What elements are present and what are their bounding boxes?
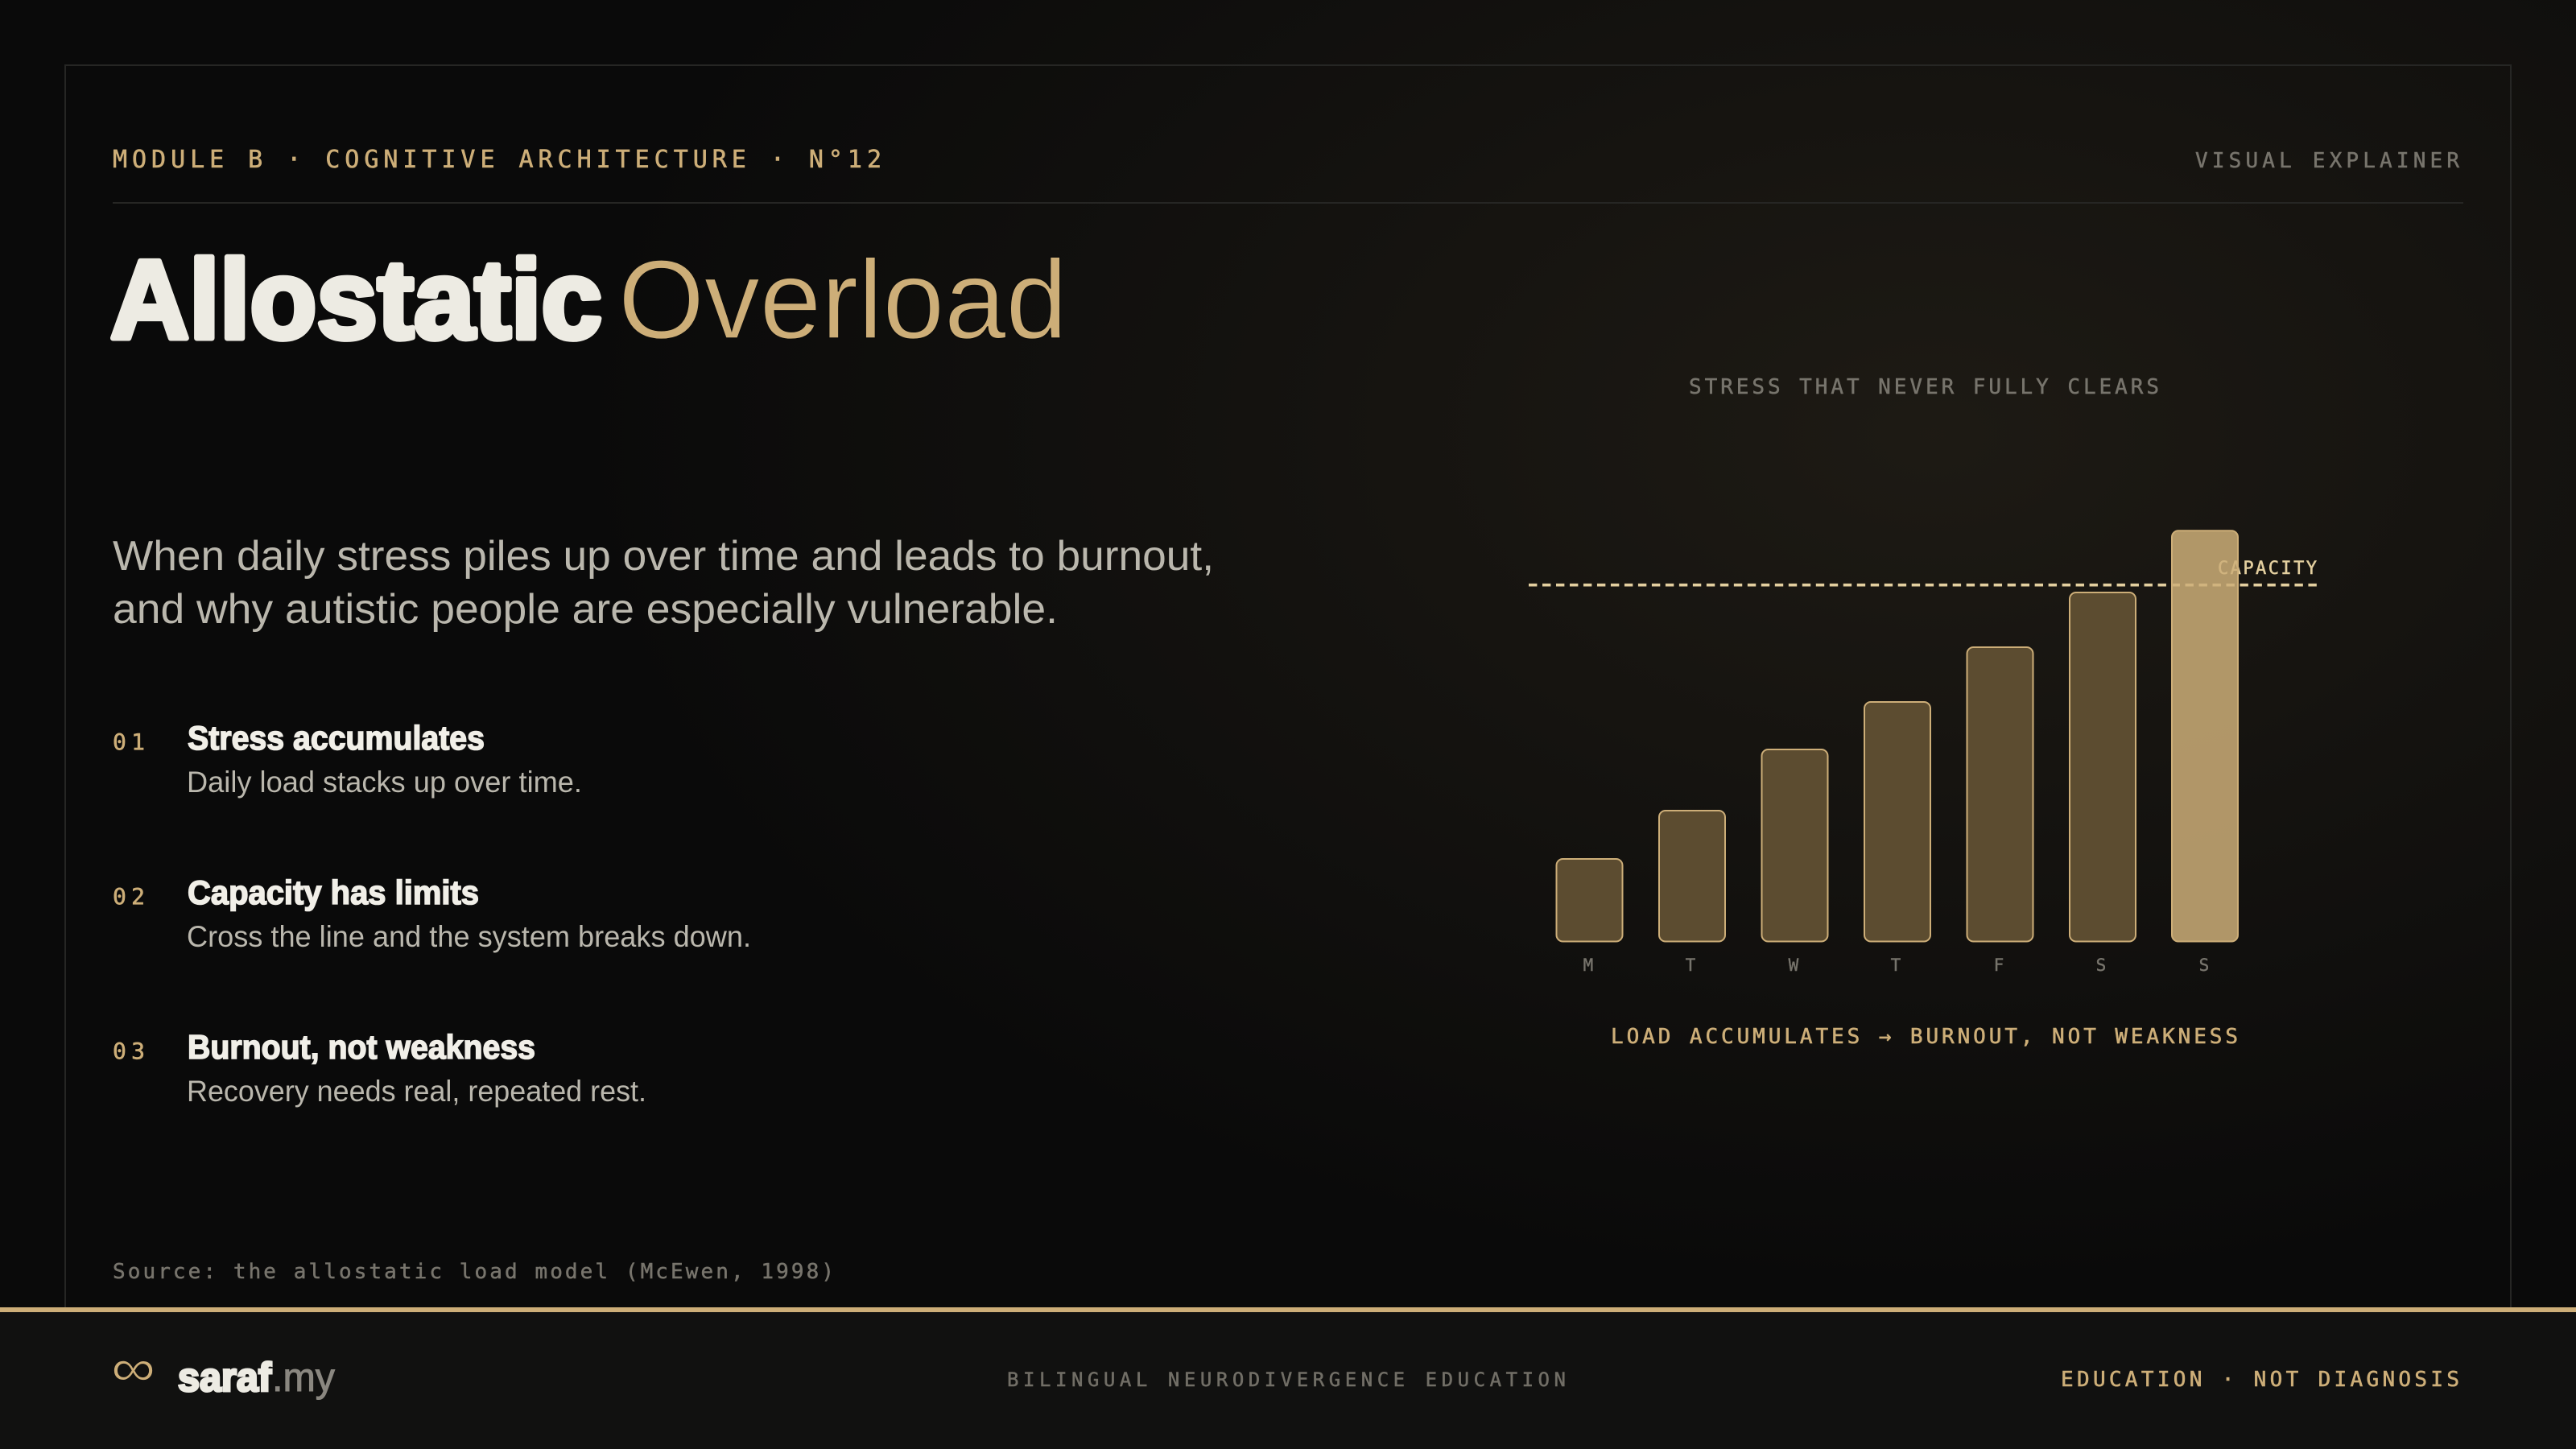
list item 03: Recovery needs real, repeated rest. (187, 1075, 646, 1108)
header (113, 146, 2463, 204)
list item 02: Cross the line and the system breaks down. (187, 920, 751, 953)
bar: Friday (1967, 647, 2033, 942)
title light word: Overload (618, 237, 1067, 362)
subtitle (113, 533, 1214, 633)
footer right text: EDUCATION · NOT DIAGNOSIS (2061, 1368, 2459, 1392)
subtitle: and why autistic people are especially vulnerable. (113, 586, 1058, 633)
list item 01: Stress accumulates (188, 719, 485, 757)
subtitle: When daily stress piles up over time and leads to burnout, (113, 533, 1214, 580)
footer center text: BILINGUAL NEURODIVERGENCE EDUCATION (1007, 1368, 1566, 1391)
bar chart (1529, 530, 2317, 975)
title bold word: Allostatic (110, 237, 602, 362)
footer (0, 1307, 2576, 1449)
visual explainer tag: VISUAL EXPLAINER (2195, 149, 2459, 173)
brand (178, 1355, 335, 1400)
list item 02: Capacity has limits (188, 873, 479, 911)
day labels: W (1789, 956, 1799, 975)
icon: infinity: ∞ (111, 1339, 155, 1397)
bar: Tuesday (1659, 811, 1725, 942)
source note: Source: the allostatic load model (McEwen, 1998) (113, 1260, 834, 1284)
list item 03: 03 (113, 1038, 145, 1064)
capacity label: CAPACITY (2218, 559, 2317, 579)
day labels: S (2199, 956, 2209, 975)
bar: Sunday highlighted (2172, 530, 2238, 942)
bar: Monday (1557, 859, 1623, 942)
day labels (1583, 956, 2209, 975)
day labels: T (1686, 956, 1696, 975)
day labels: S (2096, 956, 2106, 975)
bar: Thursday (1864, 702, 1930, 942)
day labels: F (1994, 956, 2004, 975)
title (110, 237, 1067, 362)
module label: MODULE B · COGNITIVE ARCHITECTURE · N°12 (113, 146, 881, 174)
list item 02 (113, 873, 751, 953)
day labels: M (1583, 956, 1593, 975)
list item 01 (113, 719, 582, 799)
list item 03 (113, 1028, 646, 1108)
chart title: STRESS THAT NEVER FULLY CLEARS (1689, 375, 2159, 399)
brand: .my (272, 1355, 335, 1400)
capacity line (1529, 584, 2317, 587)
list item 01: Daily load stacks up over time. (187, 766, 582, 799)
brand: saraf (178, 1355, 271, 1400)
day labels: T (1891, 956, 1901, 975)
bar: Wednesday (1761, 749, 1827, 942)
list item 02: 02 (113, 883, 145, 910)
list item 01: 01 (113, 729, 145, 755)
chart caption: LOAD ACCUMULATES → BURNOUT, NOT WEAKNESS (1611, 1025, 2238, 1049)
bar: Saturday (2070, 592, 2136, 942)
list item 03: Burnout, not weakness (188, 1028, 535, 1066)
